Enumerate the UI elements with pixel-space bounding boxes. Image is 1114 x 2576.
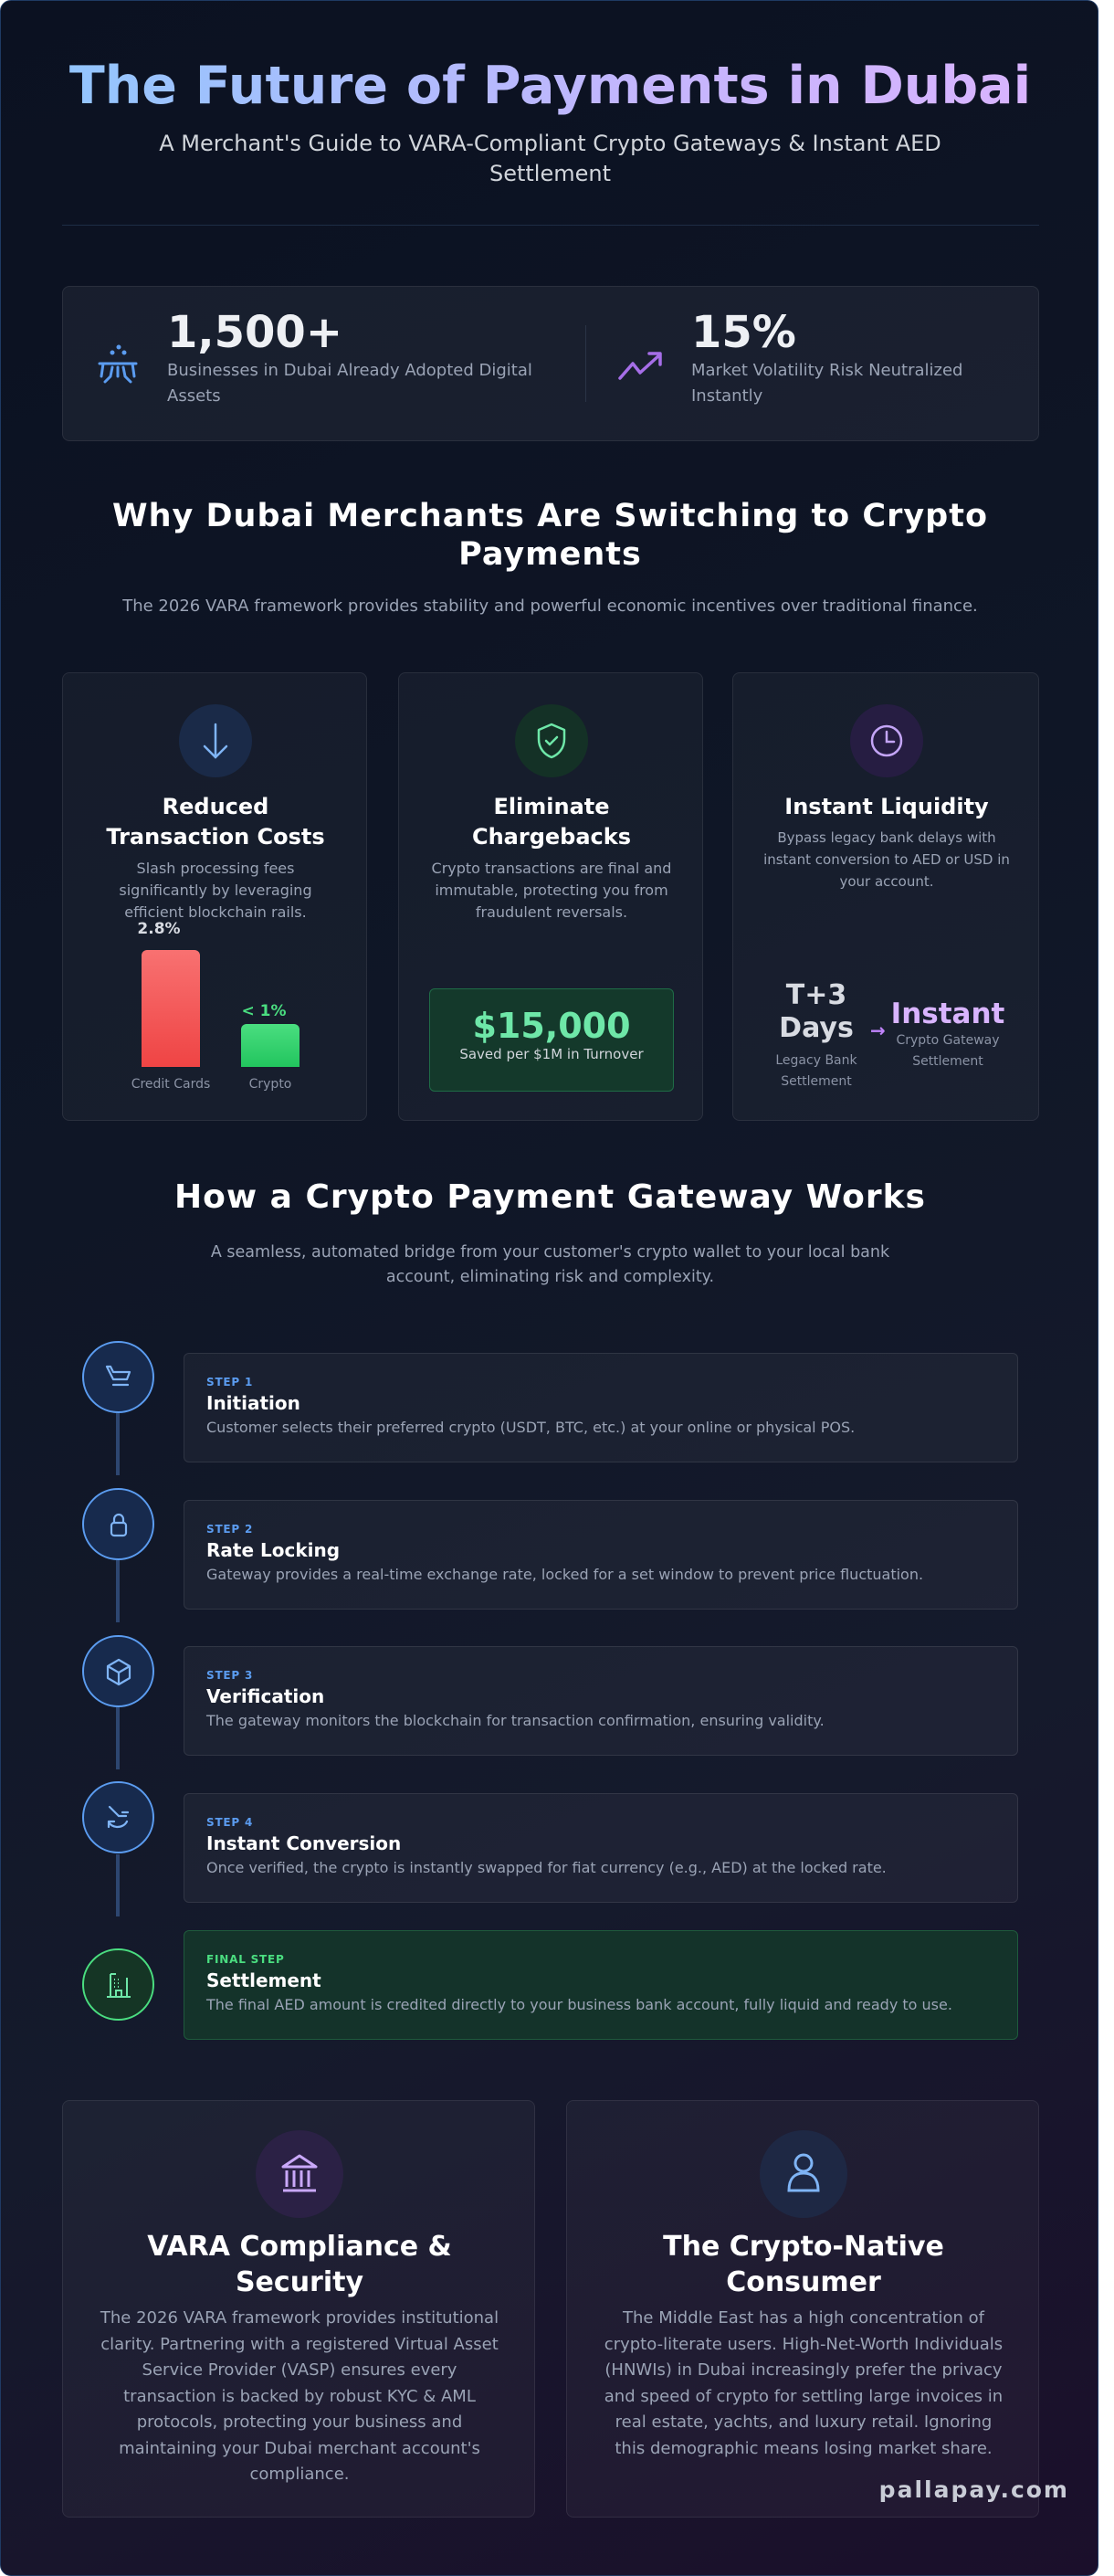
bar chart: [131, 920, 300, 1092]
step 1: Initiation: [206, 1392, 300, 1414]
card text: crypto-literate users. High-Net-Worth Individuals (HNWIs) in Dubai increasingly prefer the privacy and speed of crypto for settling large invoices in real estate, yachts, and luxury retail. Ignoring this demographic means losing market share.: [604, 2335, 1003, 2457]
comparison: Crypto Gateway Settlement: [896, 1033, 1000, 1069]
stat: volatility: [691, 307, 962, 406]
step 4: [184, 1793, 1018, 1903]
card text: Crypto transactions are final and immutable, protecting you from fraudulent reversals.: [432, 860, 671, 921]
callout: savings: [429, 988, 674, 1092]
panel: crypto-native consumer: [566, 2100, 1039, 2518]
panel: chargebacks: [398, 672, 703, 1121]
card text: Bypass legacy bank delays with instant conversion to AED or USD in your account.: [763, 829, 1010, 890]
card title: Eliminate: [493, 794, 610, 819]
step 4: STEP 4: [206, 1816, 253, 1829]
stat: volatility: 15%: [691, 307, 796, 358]
step 2: [184, 1500, 1018, 1610]
icon: trend: [618, 352, 662, 380]
step final: [184, 1930, 1018, 2040]
callout: savings: Saved per $1M in Turnover: [459, 1046, 644, 1062]
card title: [147, 2231, 452, 2298]
step 2: Gateway provides a real-time exchange rate, locked for a set window to prevent price fluctuation.: [206, 1566, 923, 1583]
card title: Instant Liquidity: [784, 794, 989, 819]
icon: down arrow: [179, 704, 252, 777]
card text: The 2026 VARA framework provides institutional clarity. Partnering with a registered Virtual Asset Service Provider (VASP) ensures every transaction is backed by robust KYC & AML protocols, protecting your business and maintaining your Dubai merchant account's compliance.: [100, 2308, 499, 2484]
card title: [106, 794, 325, 850]
bar chart: Crypto: [249, 1077, 291, 1092]
card text: The Middle East has a high concentration of: [623, 2308, 984, 2328]
step 2: STEP 2: [206, 1523, 253, 1536]
step 4: Instant Conversion: [206, 1832, 401, 1854]
stat: businesses: Businesses in Dubai Already Adopted Digital Assets: [167, 361, 532, 406]
footer brand: pallapay.com: [879, 2476, 1069, 2503]
card title: Reduced: [163, 794, 268, 819]
card title: Consumer: [726, 2266, 881, 2298]
panel: liquidity: [732, 672, 1039, 1121]
step final: The final AED amount is credited directly to your business bank account, fully liquid and ready to use.: [206, 1996, 952, 2013]
comparison: Instant: [891, 998, 1004, 1030]
step final: FINAL STEP: [206, 1953, 285, 1966]
panel: stats: [62, 286, 1039, 441]
step 3: Verification: [206, 1685, 324, 1707]
icon: cart: [82, 1341, 154, 1413]
step 3: The gateway monitors the blockchain for transaction confirmation, ensuring validity.: [206, 1712, 825, 1729]
card title: Transaction Costs: [106, 824, 325, 850]
icon: lock: [82, 1488, 154, 1560]
card title: [663, 2231, 944, 2298]
comparison: [775, 979, 1004, 1089]
step 1: Customer selects their preferred crypto (USDT, BTC, etc.) at your online or physical POS.: [206, 1419, 855, 1436]
step 1: STEP 1: [206, 1376, 253, 1388]
card text: Slash processing fees significantly by leveraging efficient blockchain rails.: [119, 860, 312, 921]
icon: hands: [99, 345, 137, 384]
icon: clock: [850, 704, 923, 777]
step 1: [184, 1353, 1018, 1462]
step final: Settlement: [206, 1969, 321, 1991]
comparison: →: [870, 1019, 886, 1041]
card title: Chargebacks: [472, 824, 631, 850]
heading: how it works: How a Crypto Payment Gateway Works: [174, 1178, 926, 1216]
heading: why switching: Why Dubai Merchants Are Switching to Crypto Payments: [112, 498, 988, 573]
icon: building: [82, 1948, 154, 2021]
card title: The Crypto-Native: [663, 2231, 944, 2263]
subheading: The 2026 VARA framework provides stability and powerful economic incentives over traditional finance.: [122, 596, 978, 616]
bar chart: 2.8%: [137, 920, 181, 938]
icon: exchange: [82, 1781, 154, 1853]
icon: cube: [82, 1635, 154, 1707]
icon: user: [760, 2130, 847, 2218]
card title: VARA Compliance &: [147, 2231, 452, 2263]
panel: reduced costs: [62, 672, 367, 1121]
subtitle: A Merchant's Guide to VARA-Compliant Crypto Gateways & Instant AED Settlement: [159, 131, 941, 186]
icon: bank: [256, 2130, 343, 2218]
step 4: Once verified, the crypto is instantly swapped for fiat currency (e.g., AED) at the locked rate.: [206, 1859, 887, 1876]
step 3: [184, 1646, 1018, 1756]
comparison: T+3: [786, 979, 846, 1011]
title: The Future of Payments in Dubai: [69, 56, 1031, 116]
card title: Security: [236, 2266, 363, 2298]
stat: businesses: [167, 307, 532, 406]
comparison: Days: [779, 1012, 854, 1044]
step 2: Rate Locking: [206, 1539, 340, 1561]
subheading: A seamless, automated bridge from your customer's crypto wallet to your local bank account, eliminating risk and complexity.: [211, 1243, 889, 1286]
card title: [472, 794, 631, 850]
icon: shield: [515, 704, 588, 777]
bar chart: < 1%: [241, 1002, 287, 1020]
bar chart: Credit Cards: [131, 1077, 210, 1092]
callout: savings: $15,000: [472, 1006, 631, 1046]
panel: VARA compliance: [62, 2100, 535, 2518]
comparison: Legacy Bank Settlement: [775, 1053, 857, 1089]
stat: volatility: Market Volatility Risk Neutralized Instantly: [691, 361, 962, 406]
step 3: STEP 3: [206, 1669, 253, 1682]
stat: businesses: 1,500+: [167, 307, 342, 358]
